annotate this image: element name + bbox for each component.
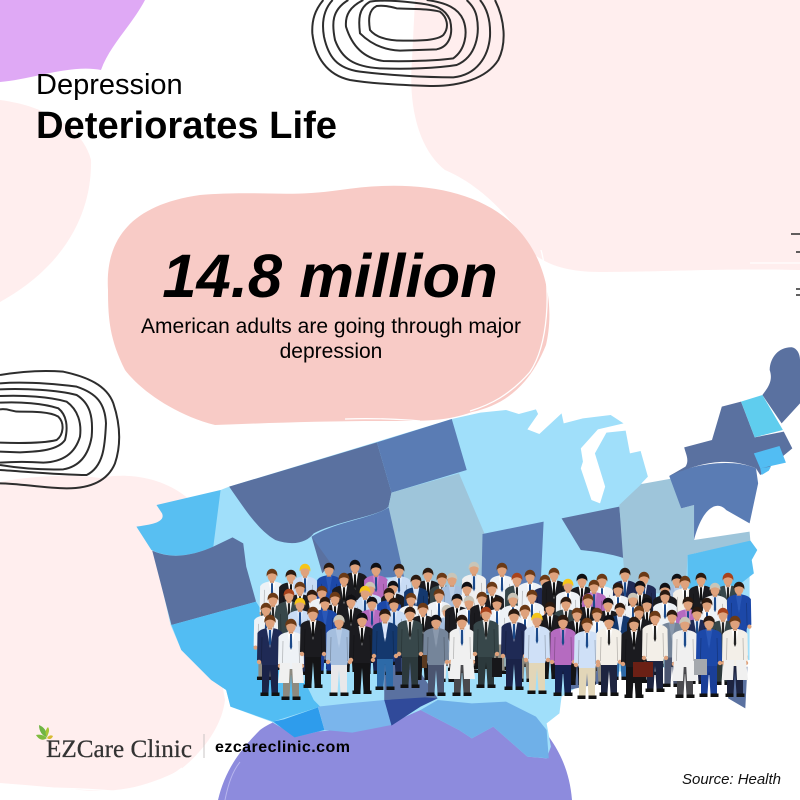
front row — [257, 607, 748, 700]
state: South Dakota — [389, 473, 485, 593]
map of the United States — [136, 347, 800, 758]
state: Pennsylvania — [669, 463, 758, 540]
icon: leaf — [36, 725, 53, 740]
title: Deteriorates Life — [36, 105, 337, 147]
state: Kansas — [481, 522, 544, 593]
website: ezcareclinic.com — [215, 739, 350, 756]
state: Ohio — [619, 478, 750, 593]
state: Washington — [136, 490, 221, 556]
middle row — [260, 573, 728, 682]
state: Virginia — [688, 541, 757, 593]
state: Illinois — [562, 507, 625, 558]
state: southern blends — [273, 697, 549, 758]
decorative contour: right edge — [791, 234, 800, 295]
state: New York — [669, 402, 792, 476]
state: Wyoming — [312, 507, 407, 580]
state: California — [171, 602, 320, 722]
background blob: left pink — [0, 100, 91, 302]
state: Montana — [229, 442, 392, 543]
third row — [253, 592, 736, 687]
state: Maine — [762, 347, 800, 423]
back row — [259, 560, 752, 659]
decorative contour: top — [312, 0, 504, 86]
callout: 14.8 million: 14.8 million — [162, 242, 498, 311]
logo: EZCare Clinic — [36, 725, 192, 763]
state: Florida — [384, 653, 747, 708]
background blob: bottom left pink — [0, 476, 225, 791]
state: Utah wedge — [312, 537, 331, 573]
state: Connecticut — [754, 446, 786, 475]
state: North Dakota — [377, 419, 467, 493]
state: New Hampshire — [741, 395, 783, 437]
divider — [203, 734, 205, 758]
background blob: bottom purple — [218, 699, 572, 800]
map base — [154, 409, 750, 758]
source: Source: Health — [682, 771, 781, 788]
background blob: top right pink — [411, 0, 800, 272]
callout: 14.8 million: depression — [280, 340, 382, 363]
title — [36, 69, 337, 147]
logo: EZCare Clinic: EZCare Clinic — [46, 736, 192, 763]
title: Depression — [36, 69, 183, 101]
callout: 14.8 million — [108, 186, 549, 425]
crowd of workers — [253, 560, 752, 700]
state: Oregon — [152, 537, 256, 625]
background blob: top left purple — [0, 0, 145, 82]
callout: 14.8 million: American adults are going through major — [141, 315, 521, 338]
decorative contour: left — [0, 371, 119, 488]
briefcases — [422, 655, 707, 677]
